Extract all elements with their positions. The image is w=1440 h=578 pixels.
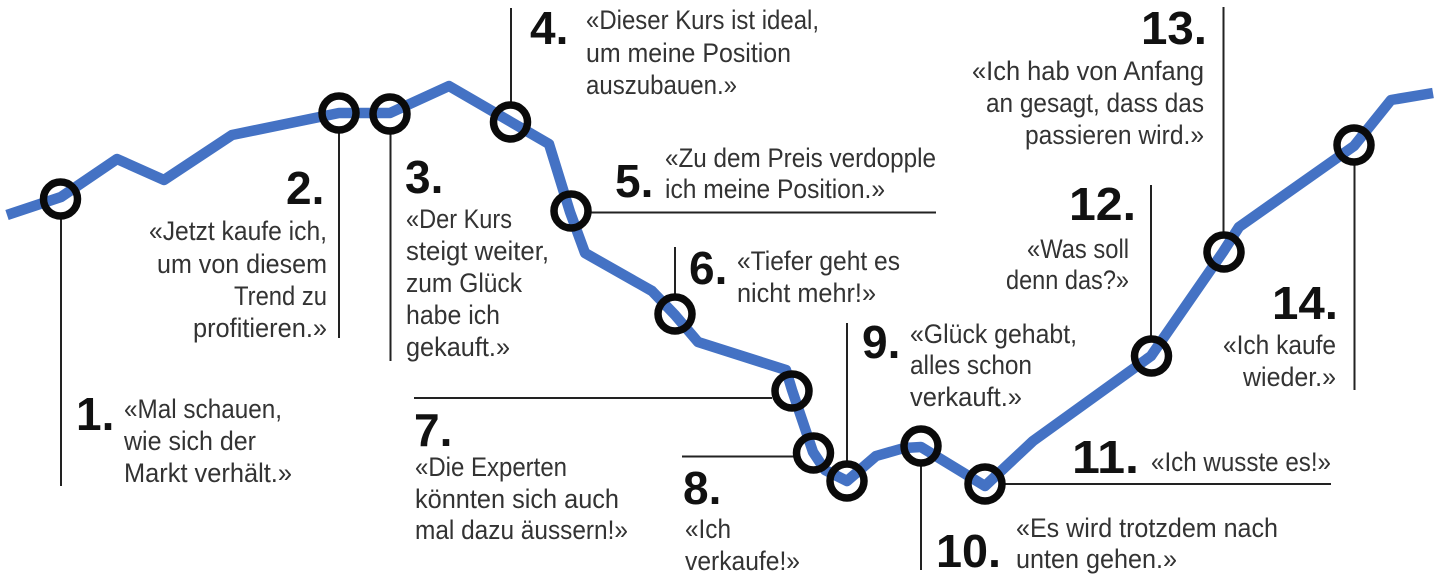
- step 7: 7.: [414, 404, 452, 456]
- step 10: unten gehen.»: [1016, 544, 1177, 574]
- step 8: [683, 462, 800, 576]
- step 3: zum Glück: [406, 268, 523, 298]
- step 13: [972, 2, 1207, 150]
- step 5: «Zu dem Preis verdopple: [665, 143, 936, 173]
- step 3: gekauft.»: [406, 332, 510, 362]
- step 3: habe ich: [406, 300, 500, 330]
- step 7: [414, 404, 628, 545]
- step 14: wieder.»: [1242, 362, 1336, 392]
- step 10: [936, 513, 1278, 577]
- step 14: [1223, 277, 1338, 392]
- step 4: «Dieser Kurs ist ideal,: [586, 5, 819, 35]
- step 10: «Es wird trotzdem nach: [1016, 513, 1278, 543]
- step 9: alles schon: [910, 350, 1032, 380]
- step 14: 14.: [1272, 277, 1338, 329]
- curve markers: [44, 96, 1371, 501]
- step 12: denn das?»: [1006, 265, 1129, 295]
- step 4: um meine Position: [586, 38, 791, 68]
- step 1: Markt verhält.»: [124, 458, 292, 488]
- step 8: 8.: [683, 462, 721, 514]
- step 5: ich meine Position.»: [665, 174, 885, 204]
- step 2: um von diesem: [157, 249, 327, 279]
- step 11: «Ich wusste es!»: [1151, 447, 1331, 477]
- step 2: Trend zu: [234, 281, 327, 311]
- price curve: [7, 86, 1433, 486]
- step 8: «Ich: [685, 514, 731, 544]
- step 5: 5.: [615, 155, 653, 207]
- step 7: mal dazu äussern!»: [415, 515, 628, 545]
- step 13: «Ich hab von Anfang: [972, 56, 1204, 86]
- step 12: [1006, 178, 1136, 295]
- step 7: «Die Experten: [415, 452, 567, 482]
- step 13: 13.: [1141, 2, 1207, 54]
- step 1: [76, 388, 292, 488]
- step 4: [530, 2, 819, 100]
- step 3: steigt weiter,: [406, 236, 549, 266]
- step 1: «Mal schauen,: [124, 394, 282, 424]
- step 3: [405, 151, 549, 362]
- step 13: passieren wird.»: [1025, 120, 1204, 150]
- step 2: 2.: [286, 162, 324, 214]
- step 9: 9.: [862, 316, 900, 368]
- step 13: an gesagt, dass das: [986, 88, 1204, 118]
- step 9: [862, 316, 1077, 412]
- step 9: verkauft.»: [910, 382, 1022, 412]
- step 2: profitieren.»: [193, 313, 327, 343]
- step 4: 4.: [530, 2, 568, 54]
- step 4: auszubauen.»: [586, 70, 737, 100]
- step 2: «Jetzt kaufe ich,: [149, 216, 327, 246]
- step 6: 6.: [689, 242, 727, 294]
- step 1: 1.: [76, 388, 114, 440]
- step 3: 3.: [405, 151, 443, 203]
- step 6: [689, 242, 900, 308]
- step 10: 10.: [936, 525, 1001, 577]
- step 7: könnten sich auch: [415, 484, 619, 514]
- step 1: wie sich der: [123, 426, 256, 456]
- step 14: «Ich kaufe: [1223, 330, 1336, 360]
- step 8: verkaufe!»: [685, 546, 800, 576]
- step 11: [1072, 431, 1331, 483]
- step 2: [149, 162, 327, 343]
- step 5: [615, 143, 936, 207]
- step 11: 11.: [1072, 431, 1139, 483]
- step 12: 12.: [1069, 178, 1136, 230]
- step 9: «Glück gehabt,: [910, 319, 1077, 349]
- step 6: «Tiefer geht es: [737, 246, 900, 276]
- step 3: «Der Kurs: [406, 204, 512, 234]
- step 12: «Was soll: [1027, 234, 1129, 264]
- step 6: nicht mehr!»: [737, 278, 876, 308]
